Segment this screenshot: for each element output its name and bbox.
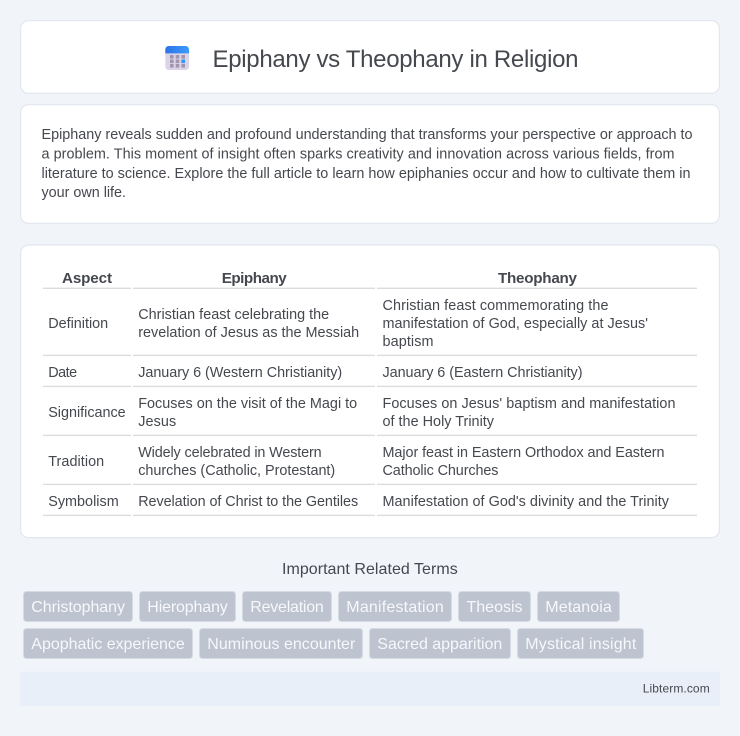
table row: Definition: manifestation of God, especially at Jesus' — [382, 316, 648, 332]
table row: Tradition: Catholic Churches — [382, 463, 498, 479]
tags: related terms: Apophatic experience — [31, 636, 185, 653]
text block: introduction paragraph: Epiphany reveals sudden and profound understanding that transforms your perspective or approach to — [42, 127, 692, 143]
table row: Tradition: churches (Catholic, Protestant) — [138, 463, 335, 479]
table row: Significance: Focuses on the visit of the Magi to — [138, 396, 357, 412]
table row: Symbolism: Revelation of Christ to the Gentiles — [138, 494, 358, 510]
table row: Symbolism: Manifestation of God's divinity and the Trinity — [382, 494, 670, 510]
table row: Date: January 6 (Western Christianity) — [138, 365, 342, 381]
tags: related terms: Mystical insight — [525, 636, 637, 653]
table row: Significance: Jesus — [138, 414, 176, 430]
table row: Tradition: Tradition — [48, 454, 104, 470]
table row: Date: January 6 (Eastern Christianity) — [382, 365, 582, 381]
table header: Aspect — [62, 270, 112, 287]
title: Epiphany vs Theophany in Religion — [212, 46, 578, 73]
table row: Significance: of the Holy Trinity — [382, 414, 495, 430]
tags: related terms: Metanoia — [545, 599, 612, 616]
panel: introduction — [21, 105, 719, 223]
tags: related terms: Numinous encounter — [207, 636, 356, 653]
tags: related terms: Sacred apparition — [377, 636, 502, 653]
text block: introduction paragraph: a problem. This moment of insight often sparks creativity and innovation across various fields, from — [42, 146, 674, 162]
tags: related terms: Manifestation — [346, 599, 444, 616]
table row: Date: Date — [48, 365, 77, 381]
text block: introduction paragraph — [42, 127, 692, 201]
table header: Theophany — [498, 270, 578, 287]
table row: Tradition — [43, 445, 697, 485]
table row: Symbolism — [43, 494, 697, 516]
table row: Significance — [43, 396, 697, 436]
panel: comparison table — [21, 245, 719, 538]
table row: Significance: Significance — [48, 405, 126, 421]
table row: Definition: baptism — [382, 334, 434, 350]
table row: Significance: Focuses on Jesus' baptism and manifestation — [382, 396, 676, 412]
tags: related terms: Revelation — [250, 599, 324, 616]
table row: Date — [43, 365, 697, 387]
footer credit: Libterm.com — [643, 682, 710, 696]
table row: Symbolism: Symbolism — [48, 494, 119, 510]
table row: Definition — [43, 298, 697, 356]
table row: Definition: Christian feast commemorating the — [382, 298, 608, 314]
table header: Epiphany — [222, 270, 287, 287]
tags: related terms: Christophany — [31, 599, 125, 616]
tags: related terms — [24, 592, 644, 658]
table header — [43, 270, 697, 289]
footer — [20, 672, 720, 706]
tags: related terms: Theosis — [466, 599, 522, 616]
table row: Definition: revelation of Jesus as the Messiah — [138, 325, 359, 341]
text block: introduction paragraph: literature to science. Explore the full article to learn how epiphanies occur and how to cultivate them in — [42, 166, 690, 182]
table row: Definition: Christian feast celebrating the — [138, 307, 329, 323]
table row: Tradition: Major feast in Eastern Orthodox and Eastern — [382, 445, 664, 461]
panel: header — [21, 21, 719, 93]
text block: introduction paragraph: your own life. — [42, 185, 126, 201]
tags: related terms: Hierophany — [147, 599, 228, 616]
icon: calendar — [165, 46, 189, 70]
heading: related terms: Important Related Terms — [282, 561, 458, 578]
table row: Definition: Definition — [48, 316, 108, 332]
table row: Tradition: Widely celebrated in Western — [138, 445, 322, 461]
